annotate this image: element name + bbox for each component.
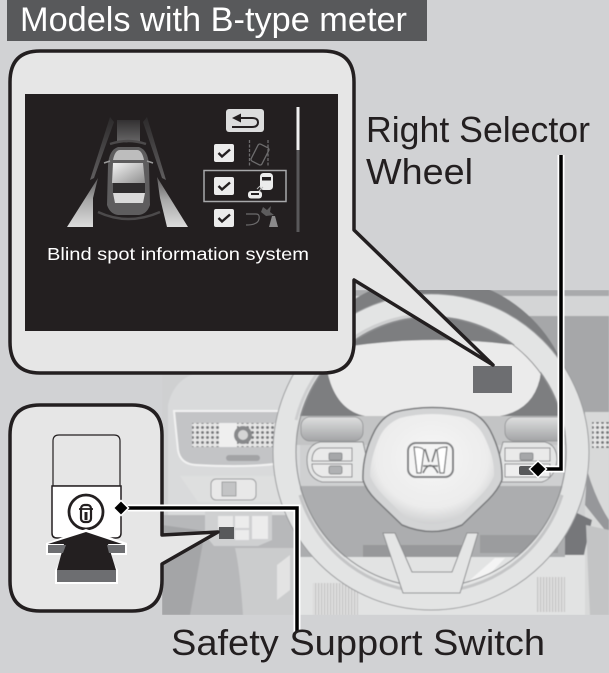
icon: car with detection zones — [67, 117, 188, 227]
label: right selector wheel — [366, 109, 590, 192]
lower dash — [300, 555, 585, 615]
switch body — [52, 435, 121, 538]
label: right selector wheel: Wheel — [366, 151, 473, 192]
dashboard illustration — [162, 277, 609, 615]
hub and logo — [363, 408, 502, 532]
panel: switch callout — [10, 405, 218, 611]
safety switch highlight — [219, 527, 234, 539]
right dash — [529, 316, 609, 414]
knee area — [162, 515, 300, 615]
checkbox 2 — [214, 177, 234, 195]
icon: blind spot cars — [248, 173, 273, 198]
scroll bar — [296, 107, 300, 232]
screen caption: Blind spot information system — [47, 244, 309, 264]
stalks — [301, 417, 363, 441]
steering wheel rim — [273, 294, 589, 610]
wheel switch highlight — [519, 466, 534, 475]
checkbox 1 — [214, 144, 234, 162]
leader: safety support switch — [114, 500, 297, 632]
cluster highlight — [473, 366, 512, 393]
left dash panel — [168, 372, 300, 520]
icon: road departure — [246, 206, 278, 227]
label: safety support switch: Safety Support Switch — [171, 622, 545, 663]
screen — [25, 94, 338, 331]
title bar: Models with B-type meter — [20, 1, 407, 39]
icon: lane keeping — [250, 140, 270, 166]
highlighted row frame — [204, 170, 286, 202]
icon: back button — [226, 109, 264, 132]
label: right selector wheel: Right Selector — [366, 109, 590, 150]
panel: display callout — [10, 51, 493, 373]
checkbox 3 — [214, 209, 234, 227]
arrow: press — [46, 529, 127, 584]
wheel upper opening — [300, 290, 558, 416]
icon: blind spot button symbol — [69, 495, 103, 529]
spokes — [307, 442, 557, 593]
leader: right selector wheel — [530, 155, 561, 478]
